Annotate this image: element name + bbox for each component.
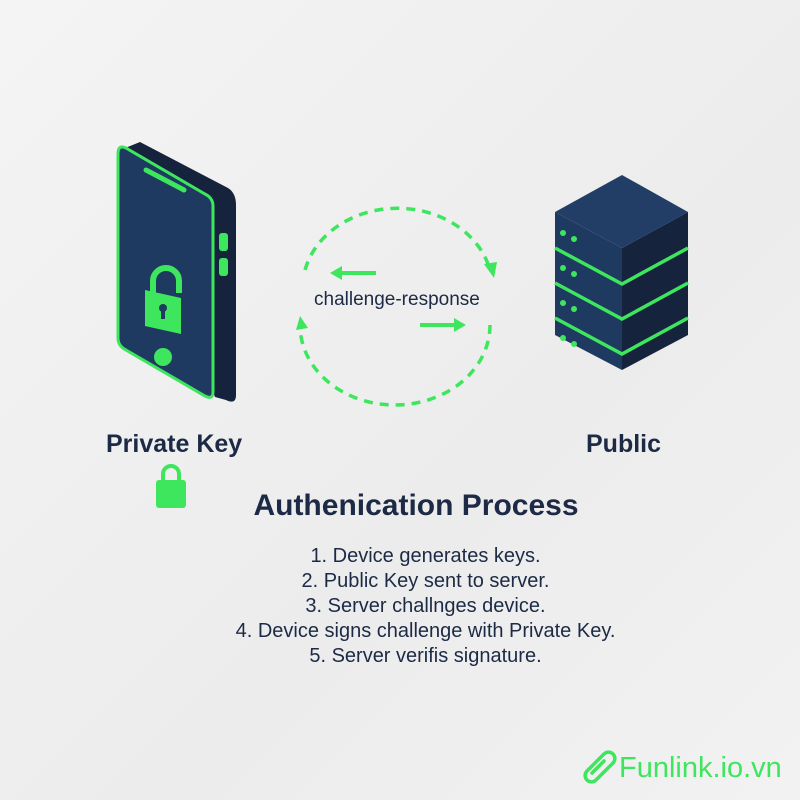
steps list: 3. Server challnges device. bbox=[305, 595, 546, 617]
icon: phone bbox=[118, 142, 236, 402]
steps list: 4. Device signs challenge with Private Key. bbox=[236, 620, 615, 642]
steps list: 1. Device generates keys. bbox=[310, 545, 541, 567]
icon: link logo bbox=[585, 752, 615, 782]
arrow heads bbox=[296, 262, 497, 332]
label: Public: Public bbox=[586, 430, 661, 458]
icon: small lock bbox=[156, 466, 186, 508]
brand: Funlink.io.vn bbox=[619, 752, 782, 784]
icon: server bbox=[555, 175, 688, 370]
steps list: 5. Server verifis signature. bbox=[309, 645, 542, 667]
heading: Authenication Process bbox=[253, 489, 579, 522]
label: Private Key: Private Key bbox=[106, 430, 242, 458]
arrows: challenge-response cycle bbox=[300, 208, 490, 405]
steps list bbox=[236, 545, 615, 667]
steps list: 2. Public Key sent to server. bbox=[302, 570, 549, 592]
label: challenge-response: challenge-response bbox=[314, 289, 480, 310]
